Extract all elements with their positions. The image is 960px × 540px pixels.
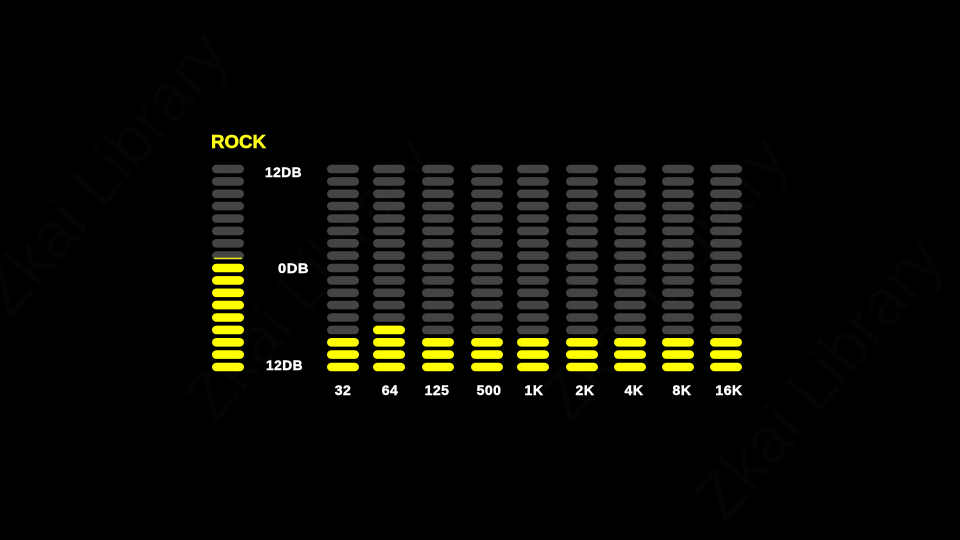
scale label: 0DB: 0DB bbox=[278, 260, 309, 276]
master level meter bbox=[212, 165, 244, 371]
frequency labels: 16K bbox=[715, 382, 743, 398]
band 1K meter bbox=[517, 165, 549, 371]
frequency labels bbox=[335, 382, 743, 398]
frequency labels: 4K bbox=[625, 382, 643, 398]
scale label: bottom 12DB: 12DB bbox=[266, 357, 303, 373]
band 2K meter bbox=[566, 165, 598, 371]
title: ROCK bbox=[211, 132, 266, 152]
frequency labels: 64 bbox=[382, 382, 398, 398]
band 4K meter bbox=[614, 165, 646, 371]
frequency labels: 1K bbox=[525, 382, 543, 398]
band 125 meter bbox=[422, 165, 454, 371]
frequency labels: 8K bbox=[673, 382, 691, 398]
watermark text: Zkai Library bbox=[679, 222, 957, 534]
frequency labels: 2K bbox=[576, 382, 594, 398]
scale label: top 12DB: 12DB bbox=[265, 164, 302, 180]
watermark text: Zkai Library bbox=[524, 122, 802, 434]
band 500 meter bbox=[471, 165, 503, 371]
band 16K meter bbox=[710, 165, 742, 371]
frequency labels: 125 bbox=[425, 382, 449, 398]
band 64 meter bbox=[373, 165, 405, 371]
band 8K meter bbox=[662, 165, 694, 371]
frequency labels: 32 bbox=[335, 382, 351, 398]
frequency labels: 500 bbox=[477, 382, 501, 398]
watermark text: Zkai Library bbox=[169, 122, 447, 434]
band 32 meter bbox=[327, 165, 359, 371]
